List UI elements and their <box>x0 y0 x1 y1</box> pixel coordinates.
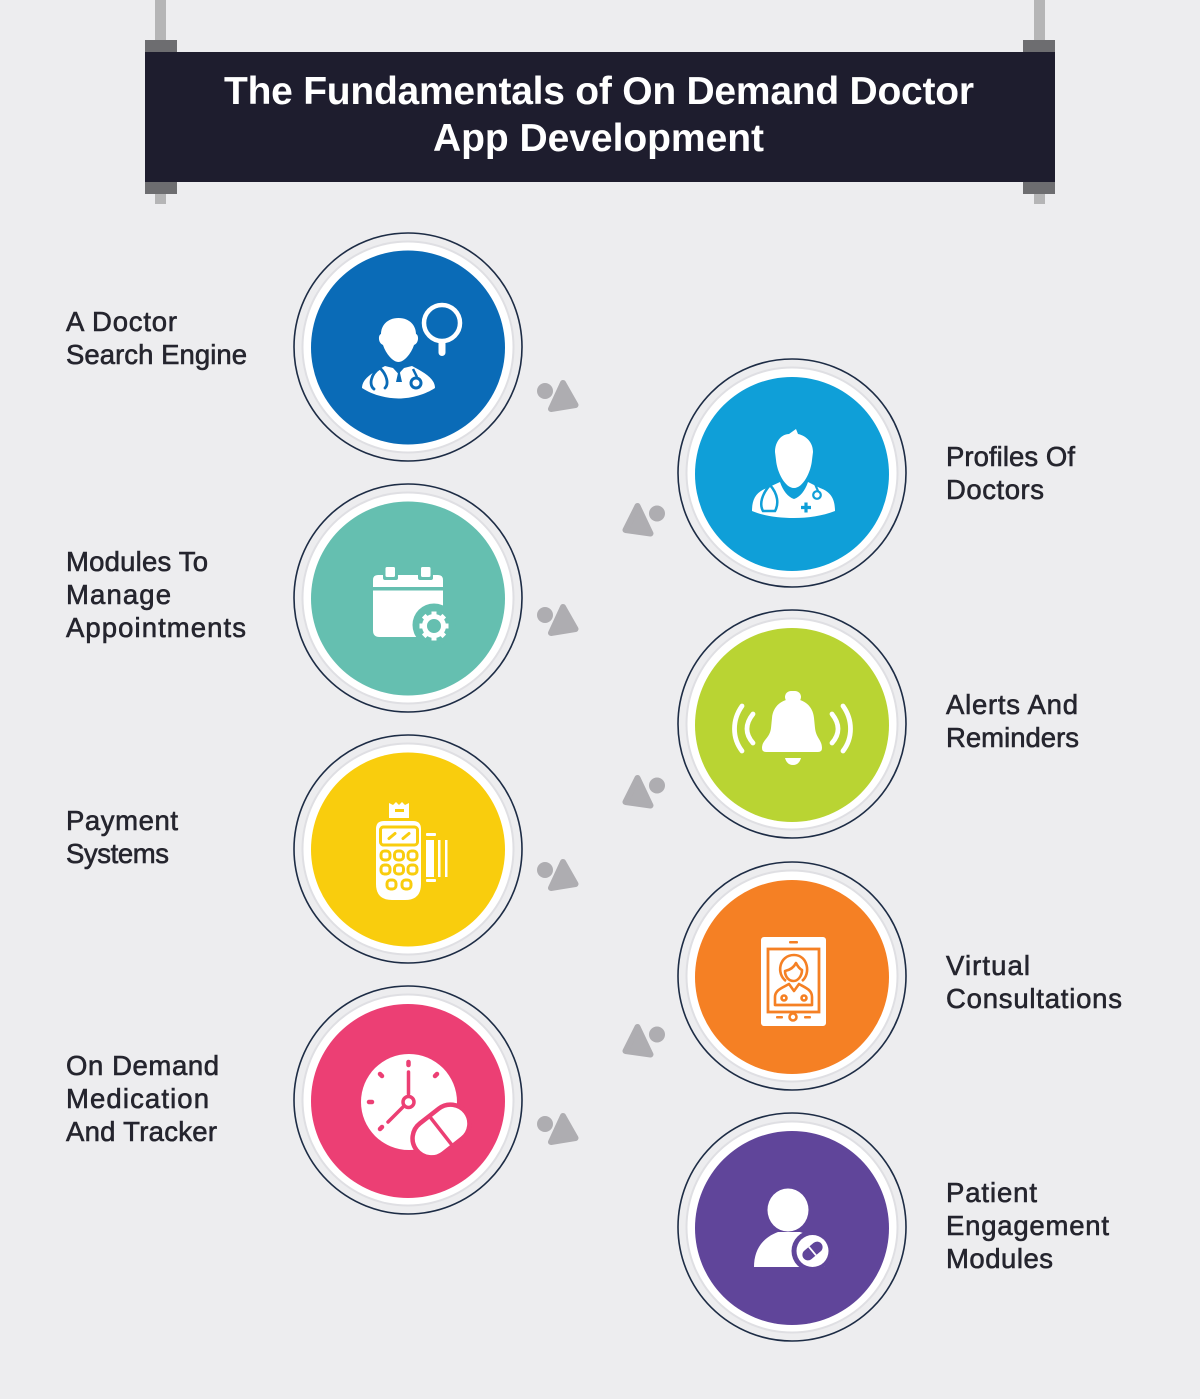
label: Alerts And <box>946 689 1078 720</box>
label: Profiles Of <box>946 441 1075 472</box>
shapes <box>626 778 665 806</box>
icon: patient with pill badge <box>754 1188 832 1272</box>
label: Modules To <box>66 546 208 577</box>
label: Virtual <box>946 950 1030 981</box>
shapes <box>537 1116 576 1142</box>
step: a doctor search engine <box>66 233 522 461</box>
shapes <box>537 862 576 888</box>
label: Reminders <box>946 722 1079 753</box>
label: Medication <box>66 1083 209 1114</box>
step: alerts and reminders <box>678 610 1079 838</box>
icon: calendar with gear <box>373 567 456 646</box>
label: A Doctor <box>66 306 177 337</box>
label: Payment <box>66 805 178 836</box>
label: Search Engine <box>66 339 247 370</box>
icon: doctor with magnifier <box>362 305 460 398</box>
title: App Development <box>433 117 764 160</box>
shapes <box>537 607 576 633</box>
step: payment systems <box>66 735 522 963</box>
shapes <box>626 506 665 534</box>
label: Systems <box>66 838 169 869</box>
icon: tablet with doctor <box>761 937 826 1026</box>
step: patient engagement modules <box>678 1113 1109 1341</box>
icon: clock with pill <box>361 1054 477 1165</box>
label: Modules <box>946 1243 1053 1274</box>
icon: card terminal <box>376 802 448 900</box>
icon: bell <box>734 691 850 765</box>
label: And Tracker <box>66 1116 217 1147</box>
step: virtual consultations <box>678 862 1122 1090</box>
label: Patient <box>946 1177 1037 1208</box>
icon: doctor <box>752 429 835 518</box>
label: Engagement <box>946 1210 1109 1241</box>
step: on demand medication and tracker <box>66 986 522 1214</box>
label: Appointments <box>66 612 246 643</box>
label: On Demand <box>66 1050 219 1081</box>
label: Consultations <box>946 983 1122 1014</box>
shapes <box>626 1026 665 1054</box>
title: The Fundamentals of On Demand Doctor <box>224 70 974 113</box>
shapes <box>537 383 576 409</box>
label: Doctors <box>946 474 1044 505</box>
step: modules to manage appointments <box>66 484 522 712</box>
title banner <box>145 0 1055 204</box>
label: Manage <box>66 579 171 610</box>
step: profiles of doctors <box>678 359 1075 587</box>
